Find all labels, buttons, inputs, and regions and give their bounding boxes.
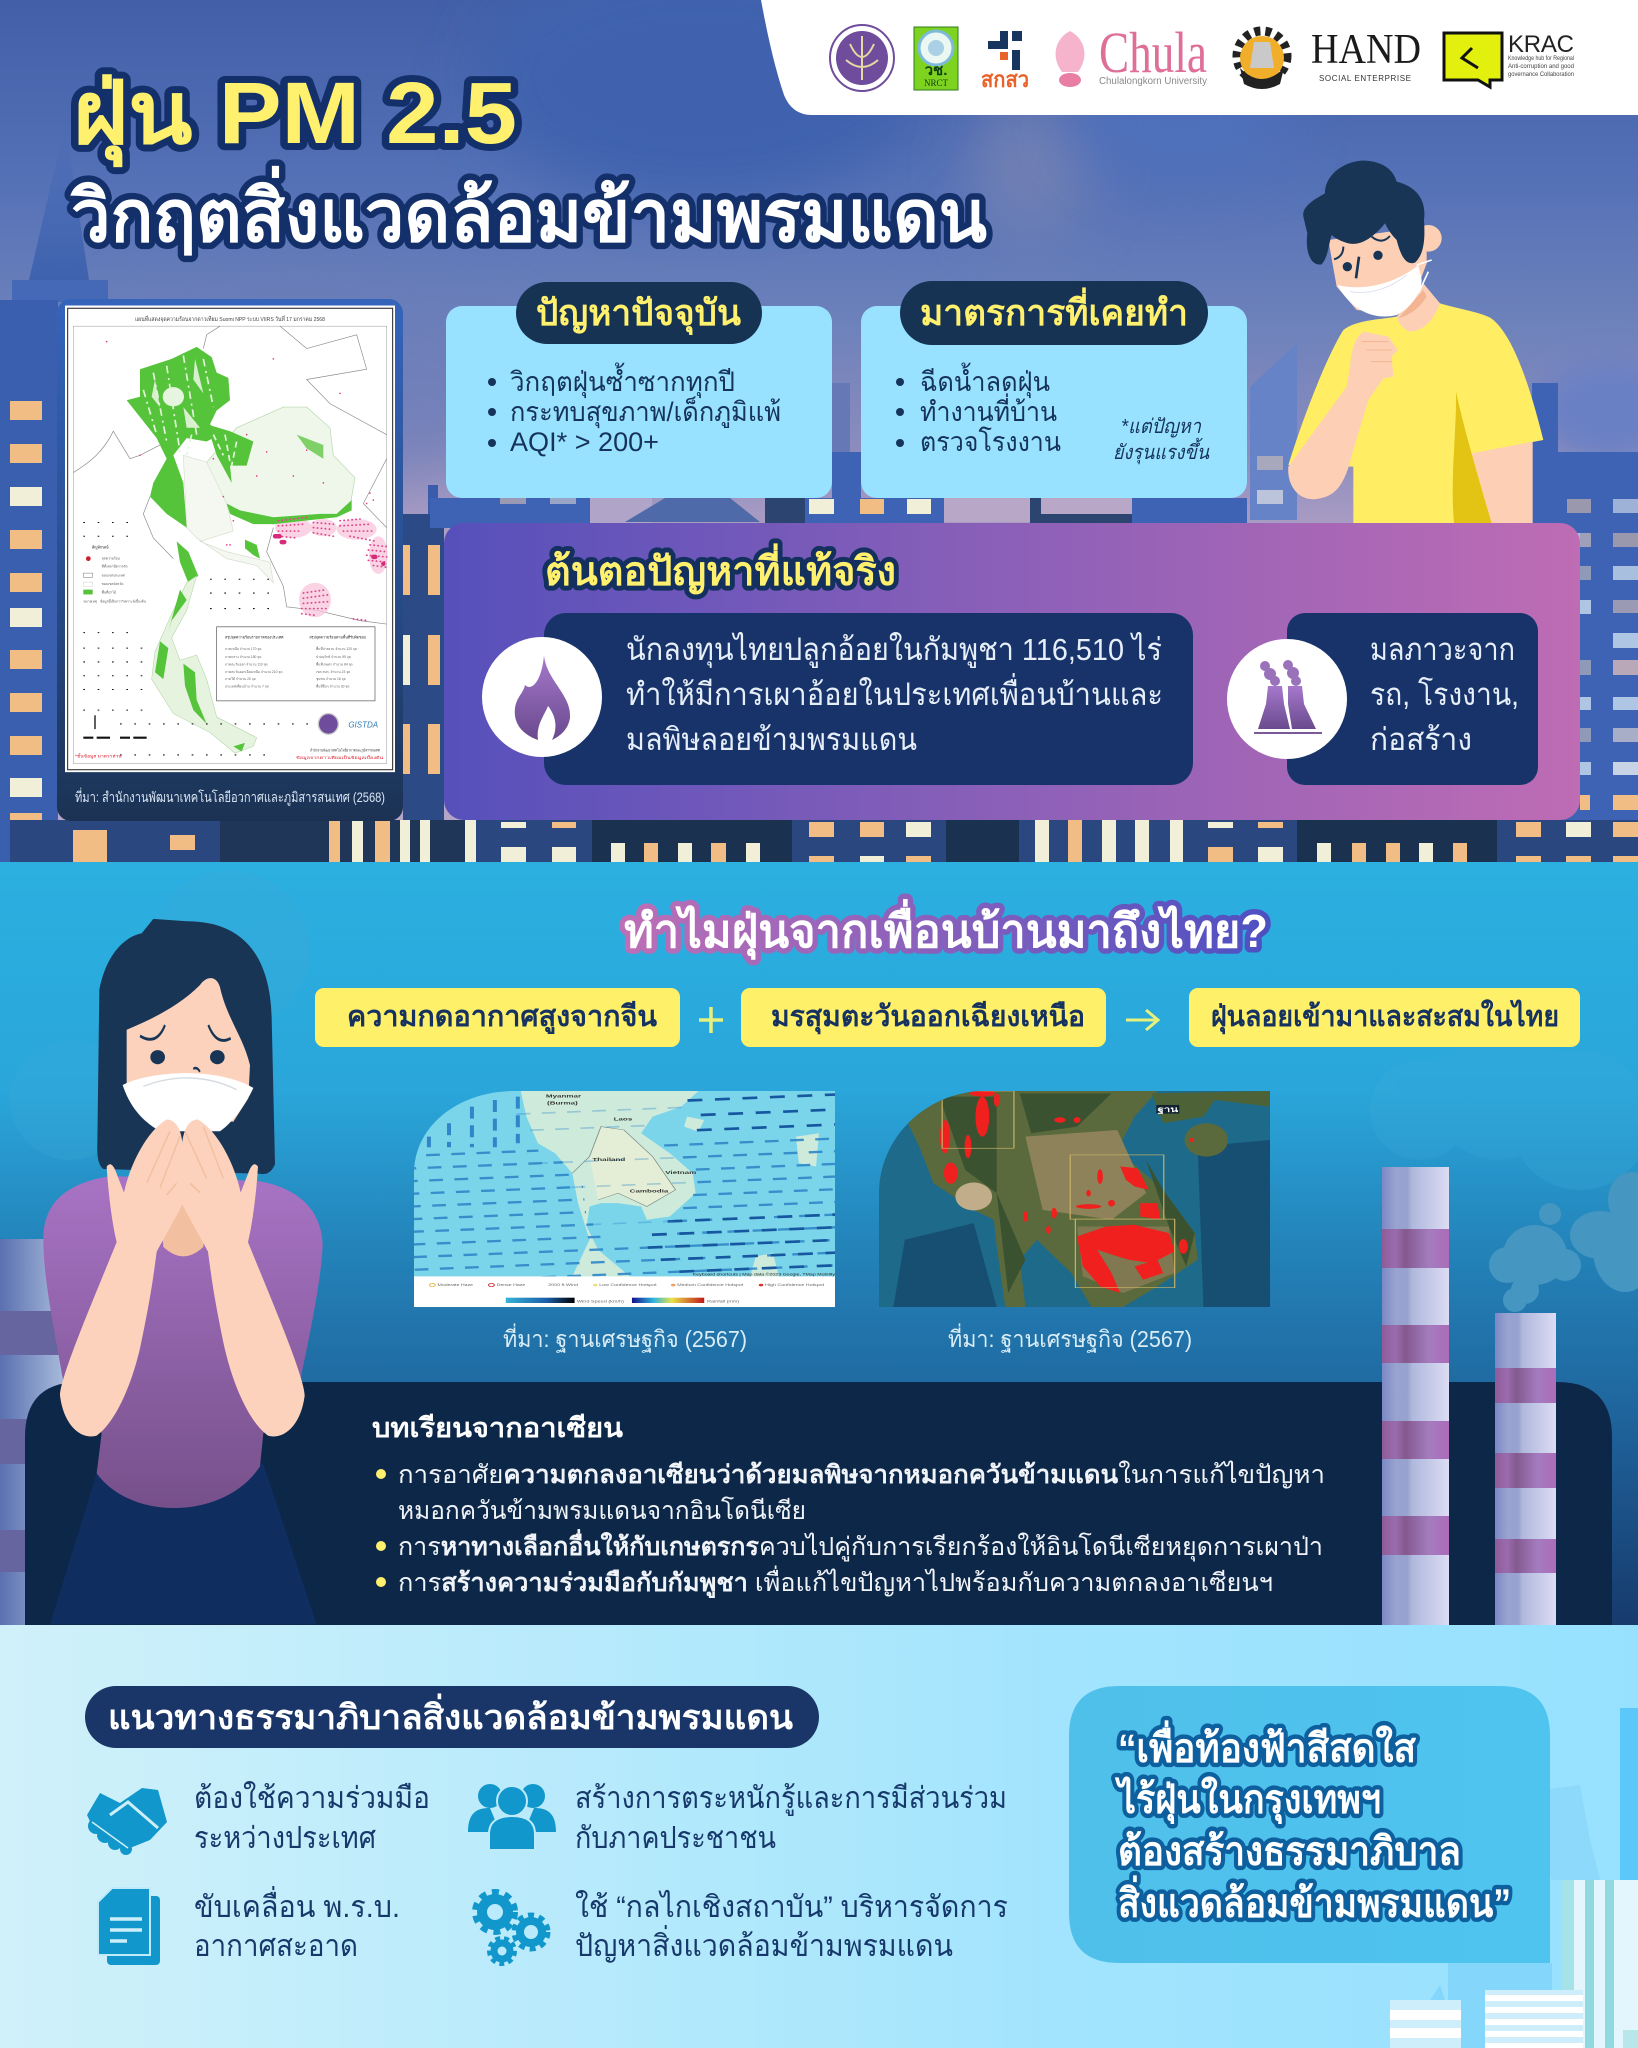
right white tower (1562, 1880, 1638, 2048)
wind map: Myanmar (546, 1094, 582, 1099)
item: public awareness: กับภาคประชาชน (575, 1822, 776, 1855)
bullet list (488, 362, 781, 457)
logo: Chula (1056, 20, 1207, 87)
icon: handshake (87, 1788, 167, 1855)
map summary box: ภาคตะวันออก จำนวน 110 จุด (225, 662, 268, 667)
map legend: สัญลักษณ์ (92, 544, 109, 549)
logo: KRAC: Anti-corruption and good (1508, 64, 1574, 70)
chip: dust drift (1189, 988, 1580, 1047)
side note: *แต่ปัญหา (1121, 416, 1202, 438)
map of Thailand hotspots: สำนักงานพัฒนาเทคโนโลยีอวกาศและภูมิสารสนเทศ (310, 747, 381, 752)
panel: current problems (446, 282, 832, 498)
plus sign (699, 1007, 723, 1033)
chip: monsoon (741, 988, 1106, 1047)
map legend: จุดความร้อน (102, 557, 121, 562)
map summary box: พื้นที่เกษตร จำนวน 84 จุด (316, 661, 353, 667)
map captions: ที่มา: ฐานเศรษฐกิจ (2567) (503, 1323, 747, 1353)
map summary box: ประเทศเพื่อนบ้าน จำนวน 7 จุด (225, 683, 269, 689)
map summary box: ภาคกลาง จำนวน 150 จุด (225, 655, 261, 660)
chip: high pressure: ความกดอากาศสูงจากจีน (347, 1001, 657, 1034)
man character (1288, 160, 1544, 523)
map summary box: เขต สปก. จำนวน 23 จุด (316, 670, 350, 675)
item: institutional mechanism: ปัญหาสิ่งแวดล้อมข้ามพรมแดน (575, 1925, 953, 1963)
icon: flame (482, 637, 602, 757)
wind map: (Burma) (547, 1101, 578, 1106)
map summary box: พื้นที่ป่าสงวน จำนวน 120 จุด (316, 646, 357, 652)
wind map: Vietnam (665, 1170, 696, 1175)
lessons list: การหาทางเลือกอื่นให้กับเกษตรกรควบไปคู่กับการเรียกร้องให้อินโดนีเซียหยุดการเผาป่า (398, 1529, 1323, 1562)
wind map: Dense Haze (497, 1283, 525, 1287)
bullet list: กระทบสุขภาพ/เด็กภูมิแพ้ (510, 394, 781, 429)
map source: ที่มา: สำนักงานพัฒนาเทคโนโลยีอวกาศและภูมิสารสนเทศ (2568) (75, 788, 385, 806)
lessons heading: บทเรียนจากอาเซียน (372, 1413, 624, 1443)
logo: gear emblem (1237, 31, 1287, 89)
wind map: Medium Confidence Hotspot (677, 1283, 744, 1287)
map of Thailand hotspots: ข้อมูลจากดาวเทียมเป็นข้อมูลเบื้องต้น (296, 754, 384, 760)
map legend: พื้นที่ป่าไม้ (102, 590, 116, 595)
logo: KRAC (1444, 31, 1574, 87)
logo: TSRI: สกสว (981, 67, 1029, 92)
title (69, 65, 987, 257)
lessons list (376, 1460, 1325, 1599)
map summary box (217, 627, 375, 701)
smoke cloud (1489, 1172, 1638, 1312)
wind map: High Confidence Hotspot (765, 1283, 825, 1287)
map legend (83, 544, 147, 605)
map legend: ที่ตั้งสถานีตรวจวัด (102, 564, 128, 569)
icon: factory towers (1227, 639, 1347, 759)
cause: sugarcane burning (482, 613, 1193, 785)
chimney behind character (0, 1239, 65, 1625)
pill heading: ปัญหาปัจจุบัน (536, 292, 741, 336)
icon: gears (475, 1892, 548, 1964)
cause: pollution: มลภาวะจาก (1370, 632, 1515, 667)
short chimney (1495, 1313, 1556, 1625)
map captions: ที่มา: ฐานเศรษฐกิจ (2567) (948, 1323, 1192, 1353)
side note: ยังรุนแรงขึ้น (1113, 437, 1210, 465)
map summary box: พื้นที่อื่นๆ จำนวน 30 จุด (316, 683, 349, 689)
wind map: Moderate Haze (438, 1283, 473, 1287)
arrow (1126, 1010, 1158, 1030)
causal chain chips (315, 988, 1580, 1047)
title: ฝุ่น PM 2.5 (73, 65, 517, 168)
bullet list: ทำงานที่บ้าน (920, 393, 1057, 427)
section background: why dust comes (0, 862, 1638, 1625)
bullet list: ตรวจโรงงาน (920, 427, 1061, 457)
cause: pollution (1227, 613, 1538, 785)
quote box: “เพื่อท้องฟ้าสีสดใส (1118, 1720, 1417, 1771)
cause: sugarcane burning: มลพิษลอยข้ามพรมแดน (626, 722, 917, 757)
panel: past measures (861, 281, 1247, 498)
heading: why dust: ทำไมฝุ่นจากเพื่อนบ้านมาถึงไทย? (624, 899, 1268, 960)
chip: dust drift: ฝุ่นลอยเข้ามาและสะสมในไทย (1211, 999, 1559, 1034)
wind map: Keyboard shortcuts | Map data ©2023 Google, TMap Mobility (693, 1272, 836, 1276)
item: cooperation: ต้องใช้ความร่วมมือ (194, 1781, 430, 1815)
logo: Chula: Chula (1099, 20, 1207, 85)
cause: sugarcane burning: ทำให้มีการเผาอ้อยในประเทศเพื่อนบ้านและ (626, 673, 1163, 712)
logo: ministry seal (830, 25, 894, 91)
map legend: ขอบเขตประเทศ (102, 573, 126, 578)
item: institutional mechanism (475, 1889, 1008, 1964)
panel: ASEAN lessons (25, 1382, 1612, 1625)
title: วิกฤตสิ่งแวดล้อมข้ามพรมแดน (69, 165, 987, 257)
item: institutional mechanism: ใช้ “กลไกเชิงสถาบัน” บริหารจัดการ (575, 1889, 1008, 1924)
small white building (1390, 2000, 1461, 2048)
wind map: Thailand (592, 1158, 625, 1163)
windows: mid column (403, 498, 931, 774)
logo: HAND: SOCIAL ENTERPRISE (1319, 74, 1411, 83)
pill heading (516, 282, 762, 344)
cause: pollution: รถ, โรงงาน, (1370, 677, 1519, 712)
city skyline buildings (0, 123, 1638, 862)
section background: governance (0, 1625, 1638, 2048)
map summary box: ภาคใต้ จำนวน 20 จุด (225, 677, 256, 682)
map summary box: สรุปจุดความร้อนตามพื้นที่รับผิดชอบ (309, 634, 367, 641)
lessons list: การสร้างความร่วมมือกับกัมพูชา เพื่อแก้ไขปัญหาไปพร้อมกับความตกลงอาเซียนฯ (398, 1565, 1273, 1599)
icon: people (468, 1784, 556, 1850)
logo: Chula: Chulalongkorn University (1099, 76, 1207, 87)
bullet list: ฉีดน้ำลดฝุ่น (920, 362, 1050, 399)
wind map: Wind Speed (km/h) (577, 1300, 624, 1304)
icon: document (98, 1888, 160, 1965)
governance heading (85, 1686, 819, 1748)
side note (1113, 416, 1210, 465)
quote box: ต้องสร้างธรรมาภิบาล (1118, 1830, 1461, 1874)
map of Thailand hotspots: *ชั้นข้อมูล มาตราส่วน (75, 753, 122, 760)
quote box: ไร้ฝุ่นในกรุงเทพฯ (1114, 1776, 1381, 1825)
wind map: Low Confidence Hotspot (599, 1283, 657, 1287)
section background: city sky (0, 0, 1638, 862)
map legend: ขอบเขตจังหวัด (102, 582, 123, 586)
map of Thailand hotspots: GISTDA (348, 720, 378, 729)
windows: right column (1580, 533, 1638, 810)
logo: KRAC: Knowledge hub for Regional (1508, 56, 1574, 62)
fire hotspot satellite map (879, 1091, 1270, 1307)
logo: TSRI (981, 31, 1029, 92)
cause: sugarcane burning: นักลงทุนไทยปลูกอ้อยในกัมพูชา 116,510 ไร่ (626, 632, 1162, 669)
map summary box: ภาคเหนือ จำนวน 170 จุด (225, 646, 261, 652)
panel: map card (57, 299, 403, 821)
bullet list: AQI* > 200+ (510, 427, 659, 457)
wind map: Cambodia (630, 1189, 669, 1194)
wind map: Rainfall (mm) (707, 1300, 740, 1304)
lessons list: การอาศัยความตกลงอาเซียนว่าด้วยมลพิษจากหมอกควันข้ามแดน ในการแก้ไขปัญหา (398, 1460, 1325, 1489)
item: clean air act: ขับเคลื่อน พ.ร.บ. (194, 1886, 400, 1924)
governance heading: แนวทางธรรมาภิบาลสิ่งแวดล้อมข้ามพรมแดน (108, 1693, 793, 1737)
quote box (1069, 1686, 1550, 1963)
low white building (1485, 1990, 1583, 2048)
cause: pollution: ก่อสร้าง (1370, 722, 1472, 757)
wind map: 2000 ft Wind (548, 1283, 578, 1287)
wind map: Laos (614, 1117, 633, 1122)
chimneys (1382, 1167, 1556, 1625)
map summary box: ป่าอนุรักษ์ จำนวน 95 จุด (316, 655, 351, 660)
map of Thailand hotspots: แผนที่แสดงจุดความร้อนจากดาวเทียม Suomi NPP ระบบ VIIRS วันที่ 17 มกราคม 2568 (135, 315, 325, 323)
item: public awareness (468, 1782, 1007, 1855)
item: clean air act (98, 1886, 400, 1965)
chip: monsoon: มรสุมตะวันออกเฉียงเหนือ (771, 1001, 1085, 1034)
wind map (414, 1091, 835, 1307)
item: public awareness: สร้างการตระหนักรู้และการมีส่วนร่วม (575, 1782, 1007, 1816)
bottom window strip (0, 820, 1638, 862)
heading: ต้นตอปัญหาที่แท้จริง (545, 543, 896, 595)
map captions (503, 1323, 1192, 1353)
quote box: สิ่งแวดล้อมข้ามพรมแดน” (1118, 1875, 1511, 1926)
logo: NRCT: วช. (925, 62, 947, 79)
map legend: ข้อมูลนี้เป็นการวิเคราะห์เบื้องต้น (100, 598, 147, 604)
item: cooperation: ระหว่างประเทศ (194, 1822, 376, 1855)
pill heading: มาตรการที่เคยทำ (920, 287, 1188, 333)
woman character (43, 918, 323, 1624)
bullet list: วิกฤตฝุ่นซ้ำซากทุกปี (510, 362, 735, 399)
logo: KRAC: KRAC (1508, 31, 1574, 58)
windows: left tower column (10, 401, 42, 862)
map summary box: ภาคตะวันออกเฉียงเหนือ จำนวน 210 จุด (225, 669, 283, 675)
logo: NRCT (914, 27, 958, 90)
tall chimney (1382, 1167, 1449, 1625)
map summary box: ชุมชน จำนวน 16 จุด (316, 677, 346, 682)
logo: HAND: HAND (1311, 27, 1421, 73)
chip: high pressure (315, 988, 680, 1047)
logo: KRAC: governance Collaboration (1508, 72, 1574, 78)
item: clean air act: อากาศสะอาด (194, 1930, 358, 1963)
bullet list (896, 362, 1061, 457)
map summary box: สรุปจุดความร้อนรายภาคของประเทศ (225, 634, 284, 641)
lessons list: หมอกควันข้ามพรมแดนจากอินโดนีเซีย (398, 1496, 806, 1525)
item: cooperation (87, 1781, 430, 1855)
logo strip (761, 0, 1638, 115)
map legend: หมายเหตุ (83, 600, 97, 605)
logo: NRCT: NRCT (924, 78, 948, 88)
map of Thailand hotspots (65, 306, 395, 772)
pill heading (900, 281, 1208, 345)
fire hotspot satellite map: ฐาน (1157, 1106, 1179, 1114)
panel: root causes (444, 523, 1580, 820)
